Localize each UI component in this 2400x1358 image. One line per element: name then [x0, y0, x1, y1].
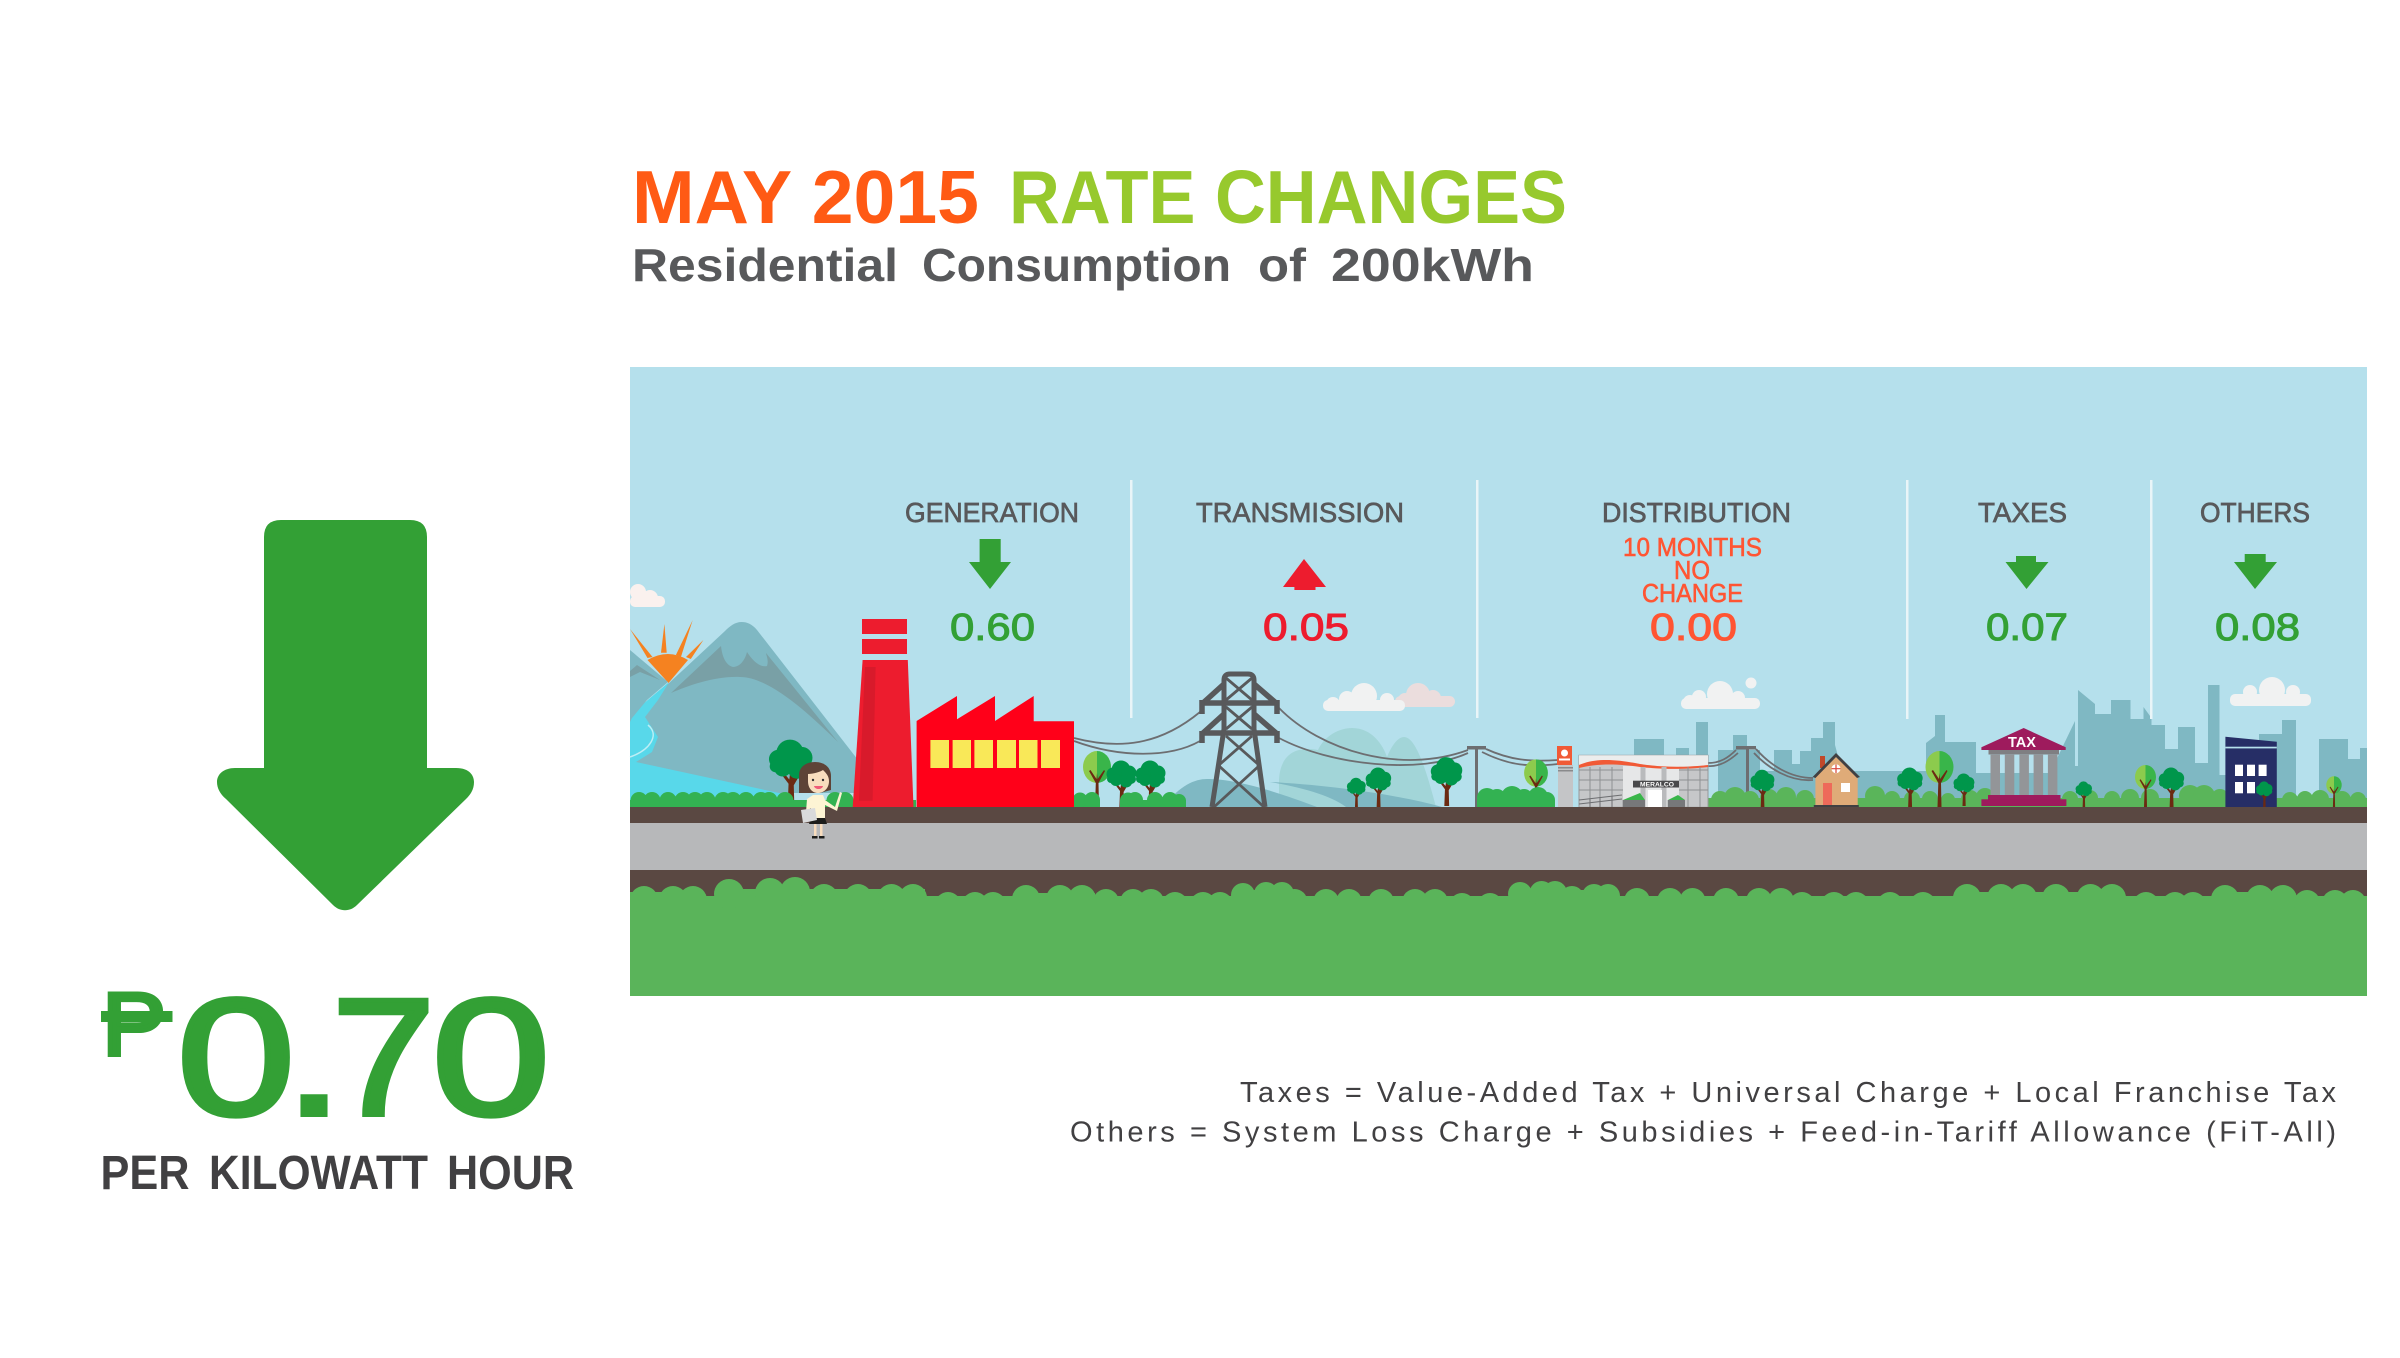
- sky: [630, 367, 2367, 996]
- mountains: [630, 622, 858, 793]
- utility building: [1557, 746, 1708, 807]
- up arrow: [1283, 559, 1326, 590]
- total amount: peso 0.70: [101, 966, 550, 1150]
- house: [1813, 753, 1860, 808]
- road: [630, 823, 2367, 870]
- utility poles: [1467, 746, 1756, 807]
- cloud left: [630, 584, 665, 607]
- pale hills: [1279, 728, 1436, 807]
- power lines: [1074, 708, 1813, 780]
- column: generation: [905, 497, 1079, 649]
- foreground hedge: [630, 877, 2367, 996]
- amount: .: [284, 966, 344, 1150]
- panel: illustrated landscape: [630, 367, 2367, 996]
- unit label: [100, 1147, 574, 1200]
- value: 0.05: [1263, 607, 1349, 649]
- river: [630, 683, 785, 807]
- sun: [630, 620, 703, 683]
- title: May 2015 Rate Changes: RATE CHANGES: [1009, 155, 1567, 239]
- column: others: [2200, 497, 2310, 649]
- earth strip: [630, 870, 2367, 910]
- subtitle: 200kWh: [1331, 239, 1534, 291]
- value: 0.08: [2215, 607, 2300, 649]
- heading: DISTRIBUTION: [1602, 497, 1791, 528]
- building body: [1579, 755, 1708, 807]
- down arrow: [2234, 554, 2277, 589]
- down arrow: [2006, 556, 2048, 589]
- blue hills: [1163, 779, 1442, 807]
- amount: [177, 966, 550, 1150]
- subtitle: Consumption: [922, 239, 1231, 291]
- city skyline right: [1760, 685, 2367, 807]
- subtitle: of: [1258, 239, 1307, 291]
- blue office building: [2225, 737, 2277, 807]
- column: taxes: [1978, 497, 2068, 649]
- no change note: CHANGE: [1642, 578, 1743, 608]
- amount: 0: [432, 966, 550, 1150]
- peso sign: P: [102, 974, 166, 1074]
- big down arrow: [217, 520, 474, 910]
- dividers: [1130, 480, 2152, 719]
- heading: GENERATION: [905, 497, 1079, 528]
- clouds: [1323, 677, 2311, 711]
- title: May 2015 Rate Changes: MAY 2015: [632, 155, 979, 239]
- title: May 2015 Rate Changes: [632, 155, 1567, 239]
- factory: [917, 696, 1074, 807]
- value: 0.60: [950, 607, 1035, 649]
- value: 0.00: [1650, 607, 1737, 649]
- heading: TAXES: [1978, 497, 2067, 528]
- subtitle: Residential: [632, 239, 898, 291]
- trees behind: [769, 740, 1548, 807]
- value: 0.07: [1986, 607, 2068, 649]
- ground strip: [630, 807, 2367, 823]
- building sign: MERALCO: [1640, 782, 1674, 788]
- footnote: [1070, 1077, 2336, 1148]
- tax sign: TAX: [2008, 735, 2036, 751]
- column: distribution: [1602, 497, 1791, 649]
- transmission tower: [1202, 674, 1277, 807]
- amount: 7: [332, 966, 435, 1150]
- no change note: NO: [1674, 555, 1710, 585]
- heading: OTHERS: [2200, 497, 2310, 528]
- bushes right: [1708, 785, 2367, 809]
- cloud: distribution: [1681, 678, 1760, 709]
- city skyline middle: [1634, 722, 1760, 808]
- unit label: HOUR: [447, 1147, 574, 1200]
- sign pylon: [1557, 746, 1573, 807]
- footnote: Others = System Loss Charge + Subsidies + Feed-in-Tariff Allowance (FiT-All): [1070, 1116, 2336, 1148]
- no change note: 10 MONTHS: [1623, 532, 1762, 562]
- unit label: KILOWATT: [209, 1147, 428, 1200]
- amount: 0: [177, 966, 295, 1150]
- column: transmission: [1196, 497, 1404, 649]
- cloud pair: tower: [1323, 683, 1455, 711]
- cloud: others: [2230, 677, 2311, 706]
- footnote: Taxes = Value-Added Tax + Universal Charge + Local Franchise Tax: [1240, 1077, 2336, 1109]
- woman character: [799, 762, 842, 838]
- unit label: PER: [100, 1147, 190, 1200]
- trees front right: [1750, 751, 2342, 807]
- bushes left: [630, 786, 1555, 809]
- heading: TRANSMISSION: [1196, 497, 1404, 528]
- smokestack: [853, 619, 914, 807]
- subtitle: [632, 239, 1534, 291]
- no change note: [1623, 532, 1762, 608]
- down arrow: [969, 539, 1011, 589]
- tax building: [1981, 728, 2066, 806]
